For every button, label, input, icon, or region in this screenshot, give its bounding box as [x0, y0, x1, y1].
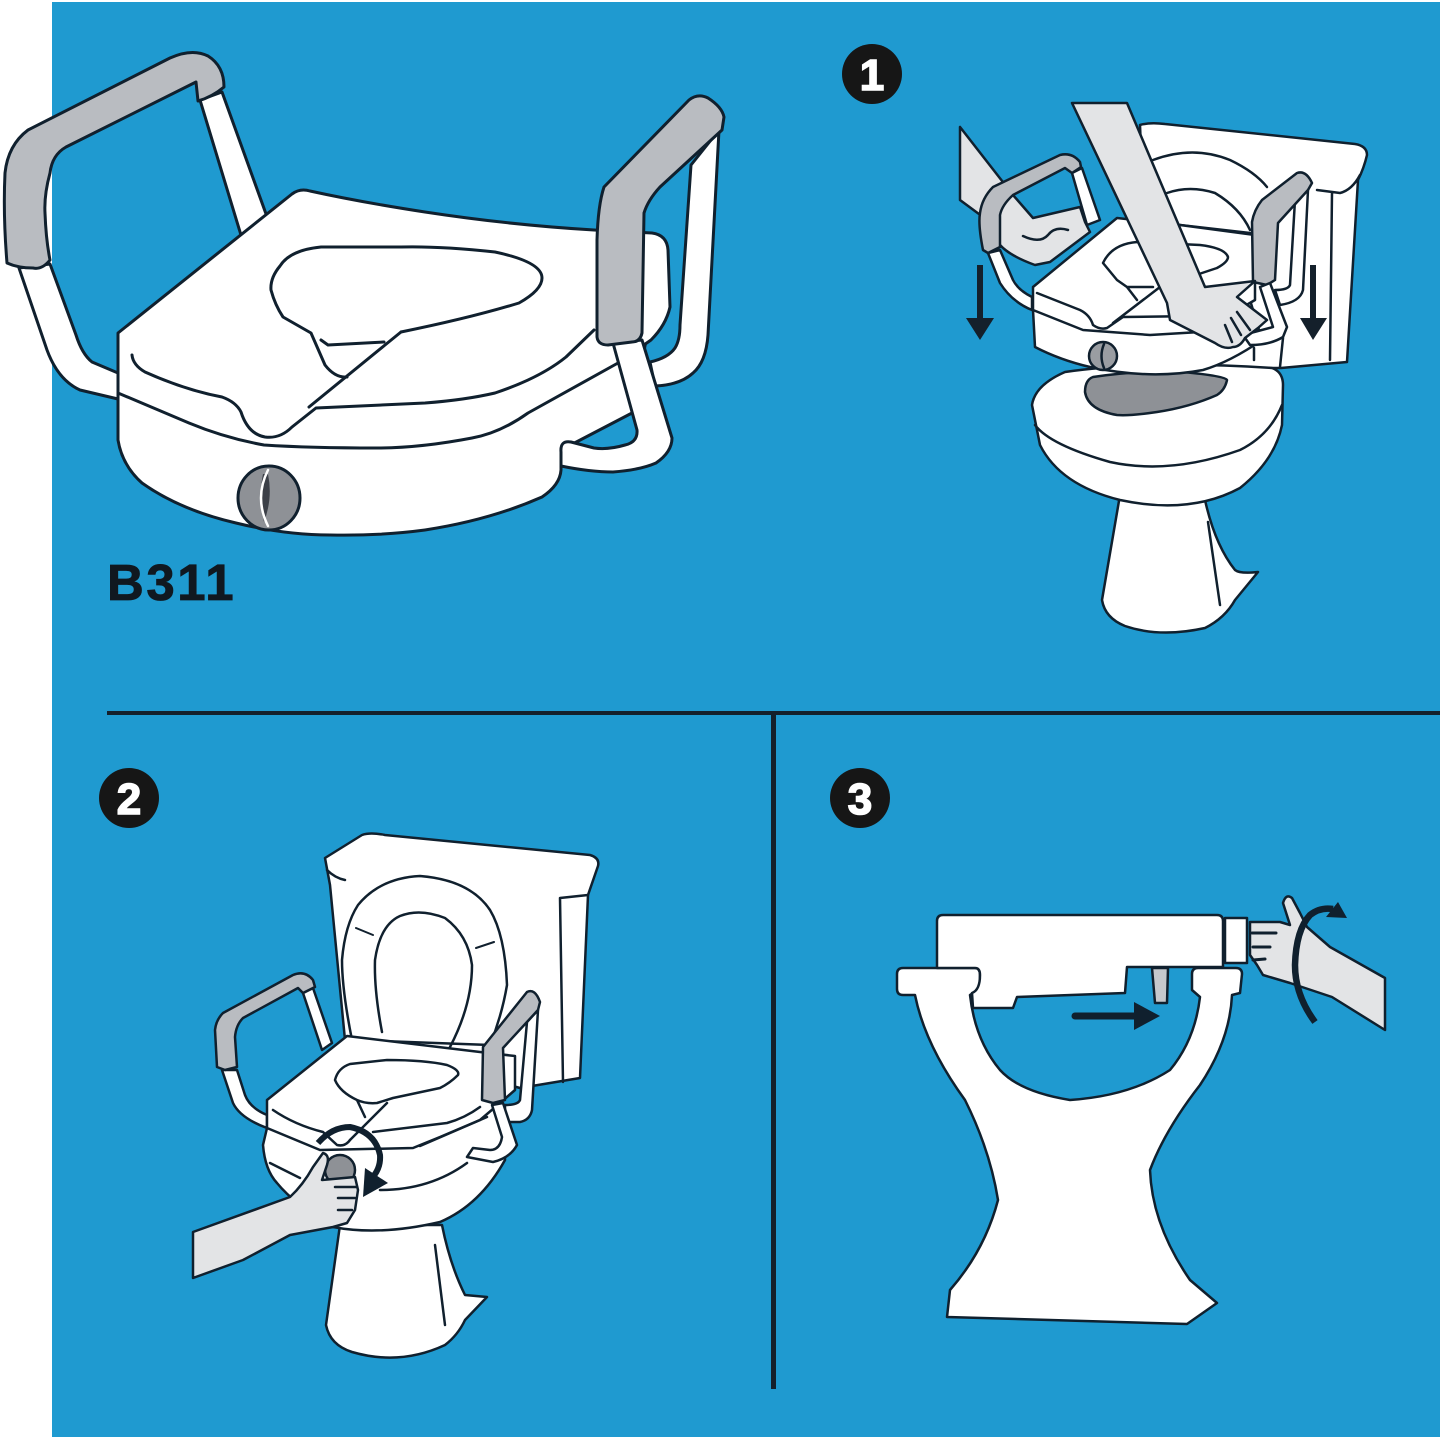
clamp [1152, 968, 1168, 1003]
step 3 push arrow [1075, 1002, 1160, 1030]
seat opening [271, 247, 542, 377]
seat riser side [937, 915, 1223, 1008]
front tube [467, 1103, 517, 1162]
product illustration: raised toilet seat B311 [4, 52, 724, 535]
knob [1225, 918, 1247, 963]
right arm pad [597, 96, 724, 345]
pedestal [326, 1225, 487, 1358]
tank [1140, 123, 1367, 368]
seat opening [335, 1060, 458, 1140]
bowl [1032, 365, 1283, 505]
step 3 rotation arrow [1295, 902, 1347, 1022]
step 1 left arrow [966, 265, 994, 340]
rear left rod [200, 92, 270, 245]
model label: B311 [107, 554, 236, 611]
knob [1089, 342, 1117, 370]
riser base [1033, 300, 1262, 374]
toilet lid [1153, 152, 1267, 233]
contour lines [270, 1107, 487, 1190]
seat base [118, 320, 650, 535]
bowl and riser body [263, 1100, 505, 1231]
riser cushion [1033, 218, 1255, 335]
knob [325, 1155, 355, 1185]
step 1 right arrow [1300, 265, 1327, 340]
step 1 badge [842, 44, 902, 104]
step 3 badge: 3 [848, 775, 872, 824]
lid [342, 876, 507, 1045]
step 1 illustration [960, 103, 1367, 633]
step 3 badge [830, 768, 890, 828]
lid marks [356, 928, 494, 948]
front arm tube [561, 340, 672, 472]
left arm tube [988, 250, 1032, 310]
riser cushion [267, 1036, 515, 1150]
pedestal [1102, 495, 1258, 633]
rear frame [505, 1010, 538, 1122]
forearm and hand [1250, 896, 1385, 1030]
step 1 badge: 1 [860, 51, 884, 100]
right sleeve [482, 991, 540, 1103]
opening [1103, 242, 1228, 323]
front tube [1243, 283, 1287, 345]
right arm sleeve [1252, 172, 1312, 285]
rear right frame [650, 130, 719, 386]
rear left rod [1072, 168, 1100, 225]
step 2 badge: 2 [117, 775, 141, 824]
divider lines [107, 711, 1440, 1389]
left arm sleeve [979, 154, 1081, 253]
left arm tube [222, 1070, 267, 1128]
toilet cross section [897, 968, 1242, 1324]
step 2 badge [99, 768, 159, 828]
right forearm and hand [1072, 103, 1267, 348]
step 2 illustration [193, 834, 598, 1358]
opening inner line [321, 340, 384, 345]
rear rod [303, 988, 332, 1050]
left hand and forearm [960, 127, 1090, 265]
left arm tube [19, 264, 118, 399]
forearm and hand [193, 1153, 358, 1278]
step 2 rotation arrow [318, 1127, 388, 1197]
step 3 illustration [897, 896, 1385, 1324]
front notch line [309, 332, 401, 407]
cushion front contour [132, 330, 594, 437]
left arm pad [4, 52, 224, 268]
bowl opening [1085, 372, 1227, 415]
left sleeve [215, 973, 315, 1070]
tension knob [238, 466, 300, 530]
rear frame [1275, 190, 1308, 305]
tank [325, 834, 598, 1088]
seat cushion [118, 190, 670, 448]
